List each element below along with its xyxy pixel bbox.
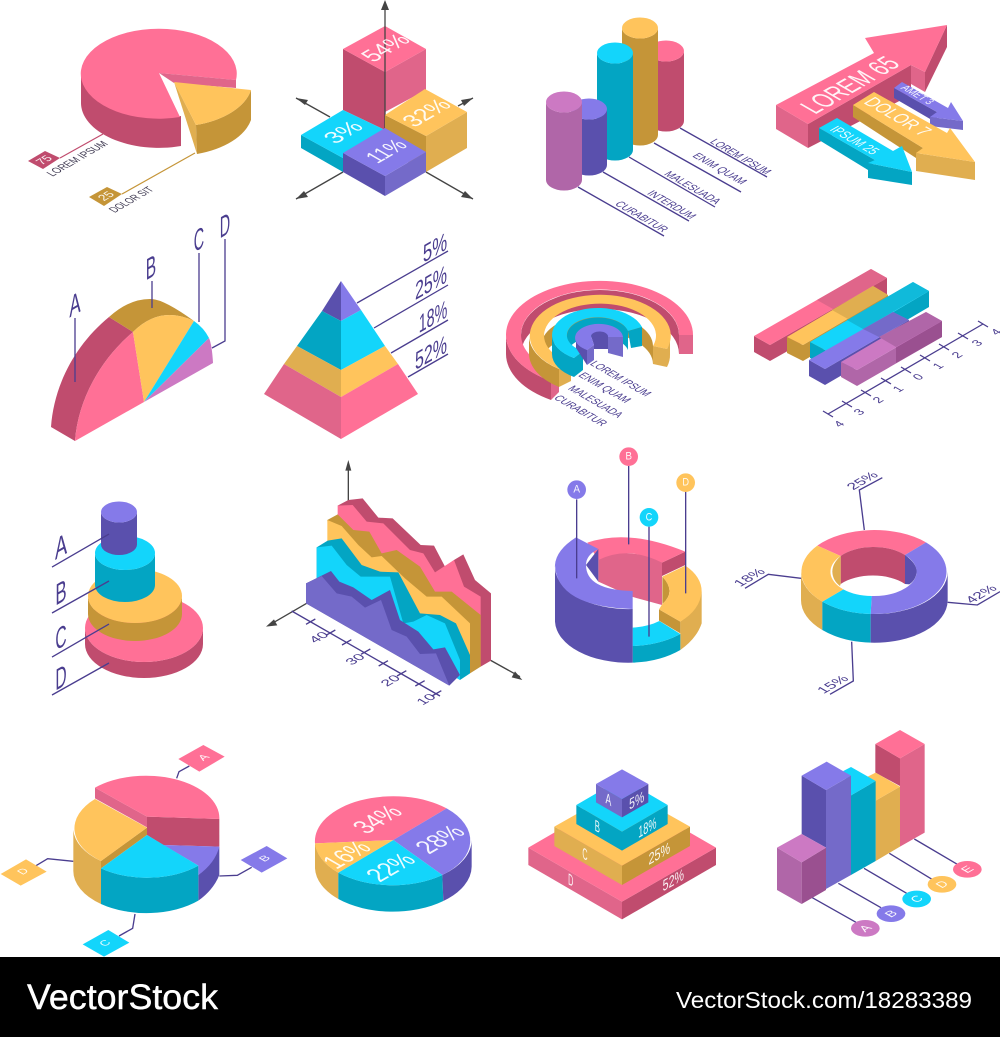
pin A: A — [573, 484, 580, 496]
ring inner wall — [832, 547, 917, 586]
leader lines — [60, 134, 195, 194]
percent labels: 52% — [415, 330, 447, 376]
letters: D — [55, 658, 67, 698]
pin C — [640, 508, 658, 527]
yellow disc — [88, 569, 182, 641]
cylinder labels: LOREM IPSUM — [707, 138, 773, 176]
cylinder labels: INTERDUM — [644, 189, 698, 221]
purple disc — [101, 502, 137, 555]
percent labels: 25% — [843, 469, 882, 492]
cylinder bar chart — [546, 18, 773, 236]
letters: C — [194, 220, 204, 260]
scale labels: 0 — [909, 372, 927, 382]
pin C: C — [646, 511, 652, 523]
label B: B — [881, 908, 901, 919]
half pie shape — [51, 299, 213, 441]
percent labels: 5% — [423, 227, 447, 269]
pink bar — [754, 269, 887, 361]
tag 75 — [28, 151, 60, 169]
cube chart with axes — [296, 0, 473, 199]
label D — [928, 876, 956, 893]
cylinder labels: ENIM QUAM — [689, 152, 749, 186]
letters: B — [55, 573, 67, 613]
percent labels: 16% — [316, 837, 378, 873]
pink layer — [338, 498, 491, 667]
orchid bar — [777, 834, 826, 904]
step D: 52% — [663, 866, 684, 896]
ring chart with percent callouts — [730, 469, 1000, 696]
cylinder labels — [612, 138, 773, 234]
tag A: A — [195, 752, 214, 763]
pink cylinder — [648, 40, 684, 132]
purple section — [555, 537, 633, 663]
tag B: B — [256, 854, 274, 864]
leader lines — [36, 766, 252, 936]
purple bar — [809, 312, 909, 385]
orchid bar — [841, 312, 942, 386]
ring labels — [551, 360, 653, 428]
ring labels: LOREM IPSUM — [587, 360, 653, 398]
cyan disc — [95, 536, 155, 602]
pie sides — [315, 840, 472, 912]
ring outer sides — [801, 572, 948, 643]
step B — [576, 778, 668, 851]
cyan cube: 3% — [317, 117, 369, 147]
purple arrow — [894, 82, 963, 130]
percent labels: 25% — [415, 260, 447, 306]
donut chart with pins — [555, 447, 702, 663]
label lorem ipsum: LOREM IPSUM — [45, 140, 111, 178]
scale labels: 4 — [830, 419, 848, 429]
purple layer — [306, 571, 460, 686]
orchid cylinder — [546, 92, 582, 190]
yellow cylinder — [622, 18, 658, 146]
yellow bar — [868, 773, 900, 861]
ring top — [801, 530, 946, 614]
ring labels: ENIM QUAM — [575, 371, 633, 405]
isometric arrows — [776, 25, 975, 185]
letters: A — [55, 527, 67, 567]
cyan cube — [301, 110, 385, 172]
leader lines — [75, 239, 225, 382]
purple bar — [802, 762, 851, 889]
cylinder labels: CURABITUR — [612, 200, 670, 234]
scale labels — [830, 327, 1000, 429]
cyan layer — [317, 538, 470, 680]
pie chart with exploded slice — [28, 29, 251, 215]
big pink arrow: LOREM 65 — [793, 52, 907, 118]
letters: C — [55, 618, 67, 658]
leader lines — [357, 251, 448, 377]
letters: A — [69, 285, 81, 325]
cyan cylinder — [597, 42, 633, 160]
isometric bar chart with labels — [777, 730, 982, 937]
pin B: B — [625, 451, 632, 463]
percent labels: 34% — [346, 801, 409, 838]
step D: D — [568, 871, 573, 891]
scale labels: 2 — [948, 350, 966, 360]
pink bar — [875, 730, 925, 847]
label A — [851, 920, 880, 937]
purple cylinder — [571, 98, 607, 175]
cyan slice — [101, 835, 198, 913]
yellow layer — [327, 514, 481, 673]
label C — [902, 891, 931, 907]
ring labels: CURABITUR — [551, 394, 609, 428]
pink ring — [506, 281, 693, 400]
yellow slice — [73, 799, 147, 904]
axis labels: 20 — [377, 673, 404, 688]
pink slice — [95, 776, 219, 847]
label B — [877, 905, 905, 922]
cylinder labels: MALESUADA — [661, 170, 723, 206]
stepped pie chart with tags — [1, 745, 287, 957]
axis labels: 40 — [306, 630, 332, 645]
pink cube: 54% — [355, 30, 417, 66]
tag C: C — [97, 938, 114, 948]
step A: A — [605, 790, 612, 810]
label E: E — [958, 864, 977, 875]
percent labels — [730, 469, 1000, 696]
percent labels: 18% — [419, 295, 447, 339]
leader lines — [578, 128, 767, 236]
label dolor sit: DOLOR SIT — [107, 185, 157, 215]
pie top — [315, 796, 470, 885]
stacked cylinder chart — [52, 502, 203, 698]
step C: 25% — [649, 840, 670, 869]
tag 25 — [89, 187, 122, 206]
scale labels: 3 — [968, 338, 986, 348]
tag D: D — [15, 867, 32, 877]
brand name: VectorStock — [27, 978, 219, 1017]
scale labels: 1 — [889, 384, 907, 394]
yellow cube: 32% — [396, 95, 458, 131]
percent labels — [415, 227, 447, 376]
step D — [528, 793, 716, 919]
label D: D — [932, 878, 952, 890]
axis labels: 30 — [342, 652, 369, 667]
stepped pyramid chart — [528, 769, 716, 919]
percent labels: 18% — [730, 566, 769, 589]
letters — [69, 206, 230, 325]
pyramid body — [264, 281, 418, 439]
horizontal isometric bars with scale — [754, 269, 1000, 429]
yellow bar — [787, 286, 888, 361]
yellow section — [659, 566, 702, 650]
cyan arrow — [819, 118, 912, 185]
scale labels: 2 — [869, 395, 887, 405]
tag A — [178, 745, 225, 772]
label A: A — [856, 923, 875, 934]
letters — [55, 527, 67, 698]
tag 75: 75 — [32, 153, 56, 167]
axis labels: 10 — [413, 692, 440, 707]
cyan ring — [552, 308, 642, 377]
tag C — [83, 930, 129, 957]
label C: C — [907, 893, 927, 905]
purple slice — [163, 845, 219, 901]
yellow arrow — [853, 92, 975, 180]
leader lines — [812, 839, 957, 922]
pin D: D — [682, 477, 689, 489]
pyramid chart — [264, 227, 448, 439]
percent labels — [316, 801, 472, 886]
base axis — [292, 611, 441, 696]
step B: 18% — [638, 815, 656, 842]
cyan arrow: IPSUM 25 — [826, 123, 884, 157]
cyan bar — [843, 767, 876, 875]
pin lines — [577, 466, 686, 637]
half pie chart — [51, 206, 230, 441]
purple ring — [575, 324, 623, 365]
flat pie chart with percentages — [315, 796, 472, 912]
purple cube — [343, 128, 426, 196]
label E — [953, 861, 982, 878]
pink cube — [343, 0, 426, 130]
leader lines — [52, 534, 109, 695]
yellow arrow: DOLOR 7 — [858, 95, 936, 139]
pin A — [567, 480, 586, 499]
purple arrow: AMET 3 — [898, 84, 936, 106]
yellow cube — [385, 89, 467, 172]
percent labels: 42% — [962, 583, 1000, 605]
callout lines — [745, 478, 1000, 694]
tag B — [241, 846, 287, 873]
tag 25: 25 — [94, 189, 118, 203]
pie body — [81, 29, 237, 148]
ring labels: MALESUADA — [565, 384, 626, 420]
pink section — [587, 537, 685, 605]
scale axis — [823, 321, 988, 417]
scale labels: 1 — [929, 361, 947, 371]
pin B — [619, 447, 638, 466]
image url: VectorStock.com/18283389 — [676, 987, 972, 1013]
step B: B — [595, 817, 600, 837]
cyan bar — [810, 282, 929, 367]
scale labels: 3 — [850, 407, 868, 417]
letters: D — [220, 206, 230, 246]
pin D — [676, 473, 695, 492]
step A — [596, 769, 648, 817]
purple cube: 11% — [359, 135, 413, 167]
letters: B — [146, 248, 156, 288]
concentric ring chart — [506, 281, 693, 428]
big pink arrow — [776, 25, 947, 148]
percent labels: 28% — [408, 821, 472, 858]
tag D — [1, 859, 47, 886]
step A: 5% — [629, 788, 644, 814]
cyan section — [633, 621, 680, 663]
percent labels: 15% — [813, 673, 852, 696]
axis labels — [306, 630, 440, 707]
percent labels: 22% — [359, 849, 422, 886]
step C: C — [582, 845, 588, 865]
yellow ring — [529, 295, 671, 387]
pink disc — [85, 594, 203, 678]
exploded slice — [174, 82, 251, 154]
layered area chart — [266, 460, 522, 707]
axes — [296, 98, 473, 199]
axes — [266, 460, 522, 680]
footer bar — [0, 957, 1000, 1037]
step C — [554, 788, 690, 885]
